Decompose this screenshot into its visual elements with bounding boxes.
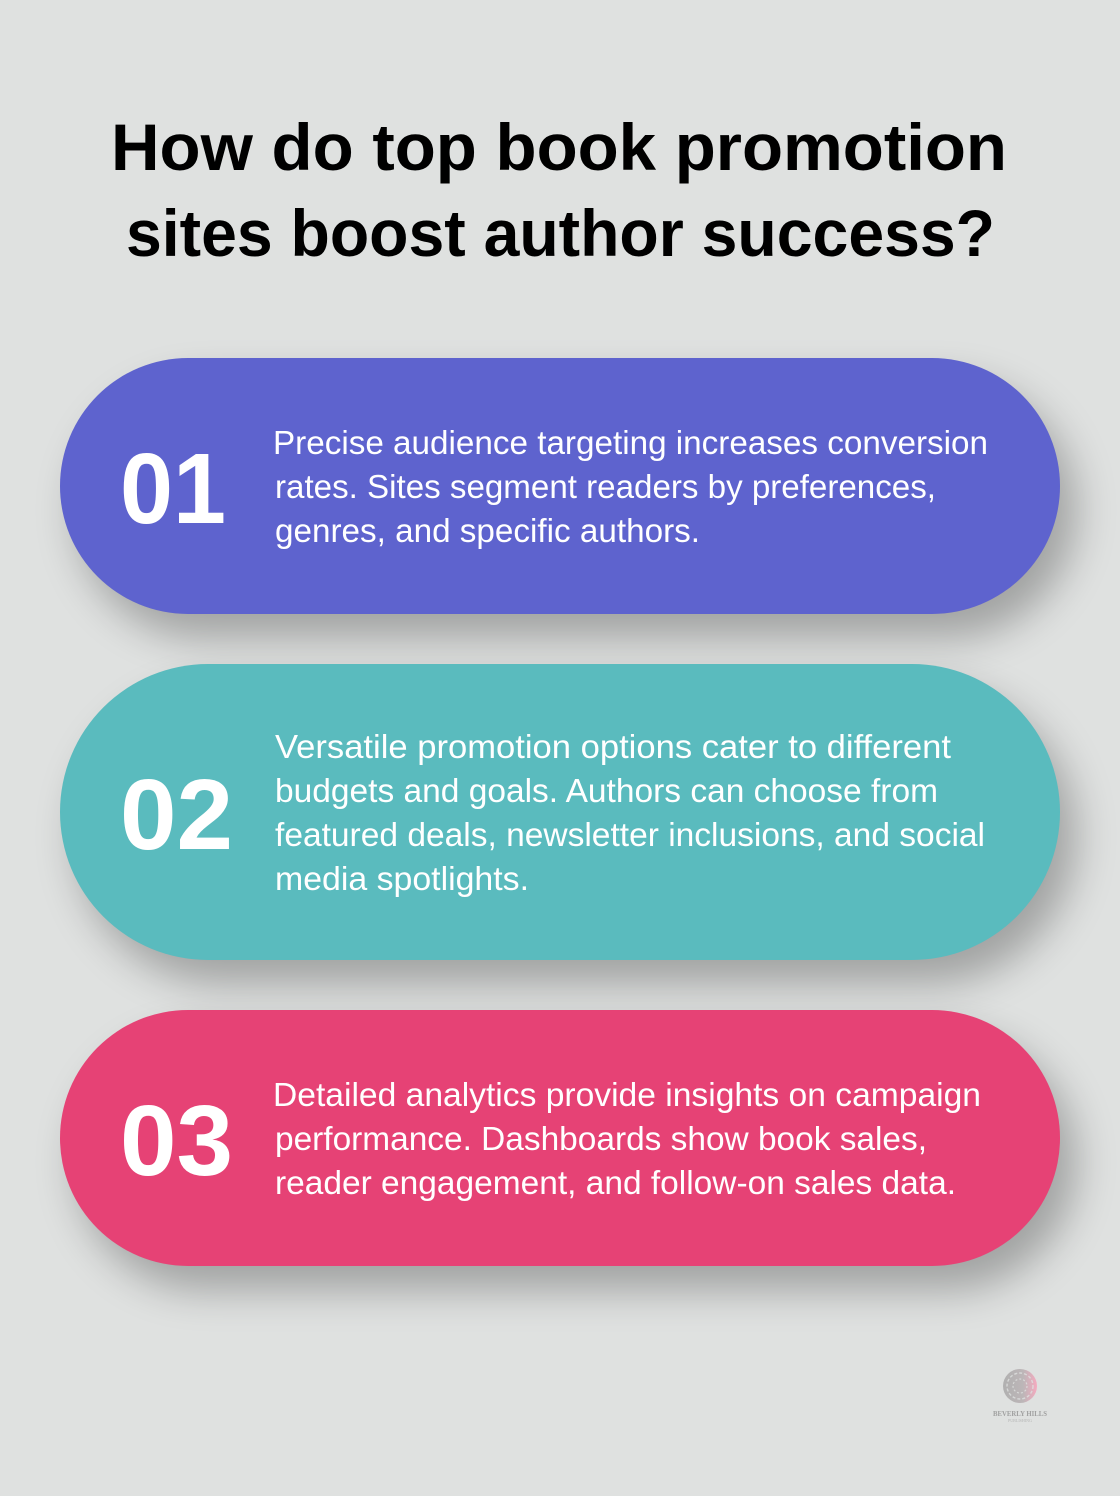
text: step 03 description: performance. Dashboards show book sales,	[275, 1120, 927, 1157]
title: sites boost author success?	[126, 196, 995, 270]
text: step 03 description: Detailed analytics provide insights on campaign	[273, 1076, 981, 1113]
number: 02: 02	[120, 759, 233, 871]
text: step 01 description: rates. Sites segment readers by preferences,	[275, 468, 936, 505]
logo: Beverly Hills Publishing: BEVERLY HILLS	[993, 1410, 1047, 1418]
text: step 02 description: Versatile promotion options cater to different	[275, 728, 951, 765]
panel: step 02	[60, 664, 1060, 960]
text: step 03 description	[273, 1076, 981, 1201]
title	[111, 110, 1007, 270]
text: step 01 description: genres, and specific authors.	[275, 512, 700, 549]
text: step 01 description: Precise audience targeting increases conversion	[273, 424, 988, 461]
logo: Beverly Hills Publishing	[993, 1369, 1047, 1423]
panel: step 01	[60, 358, 1060, 614]
text: step 02 description: media spotlights.	[275, 860, 529, 897]
logo: Beverly Hills Publishing: PUBLISHING	[1008, 1418, 1032, 1423]
text: step 02 description	[275, 728, 985, 897]
number: 01: 01	[120, 433, 226, 545]
number: 03: 03	[120, 1085, 233, 1197]
text: step 02 description: budgets and goals. Authors can choose from	[275, 772, 938, 809]
text: step 02 description: featured deals, newsletter inclusions, and social	[275, 816, 985, 853]
panel: step 03	[60, 1010, 1060, 1266]
text: step 01 description	[273, 424, 988, 549]
title: How do top book promotion	[111, 110, 1007, 184]
text: step 03 description: reader engagement, and follow-on sales data.	[275, 1164, 956, 1201]
